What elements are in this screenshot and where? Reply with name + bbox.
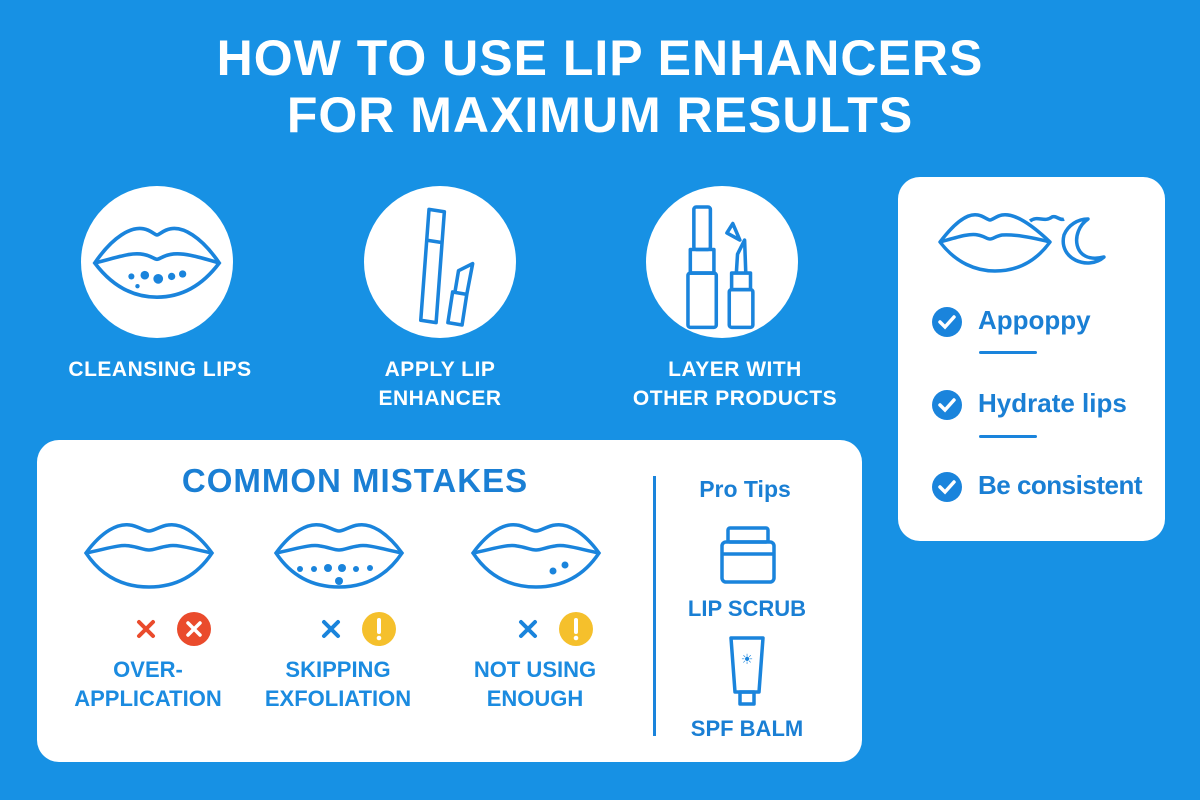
mistake 2: SKIPPING — [285, 657, 391, 682]
heading: COMMON MISTAKES — [182, 462, 528, 499]
title: FOR MAXIMUM RESULTS — [287, 87, 913, 143]
label — [378, 358, 502, 410]
panel: checklist — [898, 177, 1165, 541]
panel: common mistakes — [37, 440, 862, 762]
label: APPLY LIP — [385, 358, 495, 381]
mistake 3: NOT USING — [474, 657, 596, 682]
title: HOW TO USE LIP ENHANCERS — [217, 30, 983, 86]
mistake 3 — [470, 523, 602, 711]
title — [217, 30, 983, 143]
mistake 3: ENOUGH — [487, 686, 583, 711]
mistake 1: APPLICATION — [74, 686, 222, 711]
icon: two lipsticks — [646, 186, 798, 338]
icon: lips and moon — [938, 213, 1106, 273]
label: SPF BALM — [691, 716, 803, 741]
mistake 2 — [265, 523, 411, 711]
step 2: apply lip enhancer — [364, 186, 516, 410]
label: OTHER PRODUCTS — [633, 387, 837, 410]
icon: tube: ☀ — [741, 651, 753, 667]
heading: Pro Tips — [699, 476, 791, 502]
icon: lips with dots — [81, 186, 233, 338]
label: ENHANCER — [378, 387, 502, 410]
step 3: layer with other products — [633, 186, 837, 410]
icon: tube — [729, 636, 765, 706]
mistake 2: EXFOLIATION — [265, 686, 411, 711]
step 1: cleansing lips — [68, 186, 252, 381]
item: Hydrate lips: Hydrate lips — [978, 388, 1127, 418]
icon: tube and lipstick — [364, 186, 516, 338]
label — [633, 358, 837, 410]
mistake 1 — [74, 523, 222, 711]
mistake 1: OVER- — [113, 657, 183, 682]
label: LAYER WITH — [668, 358, 802, 381]
icon: jar — [720, 526, 776, 584]
label: CLEANSING LIPS — [68, 358, 252, 381]
item: Appoppy — [932, 305, 1091, 337]
pro tips — [688, 476, 806, 741]
label: LIP SCRUB — [688, 596, 806, 621]
item: Be consistent: Be consistent — [978, 470, 1142, 500]
item: Appoppy: Appoppy — [978, 305, 1091, 335]
